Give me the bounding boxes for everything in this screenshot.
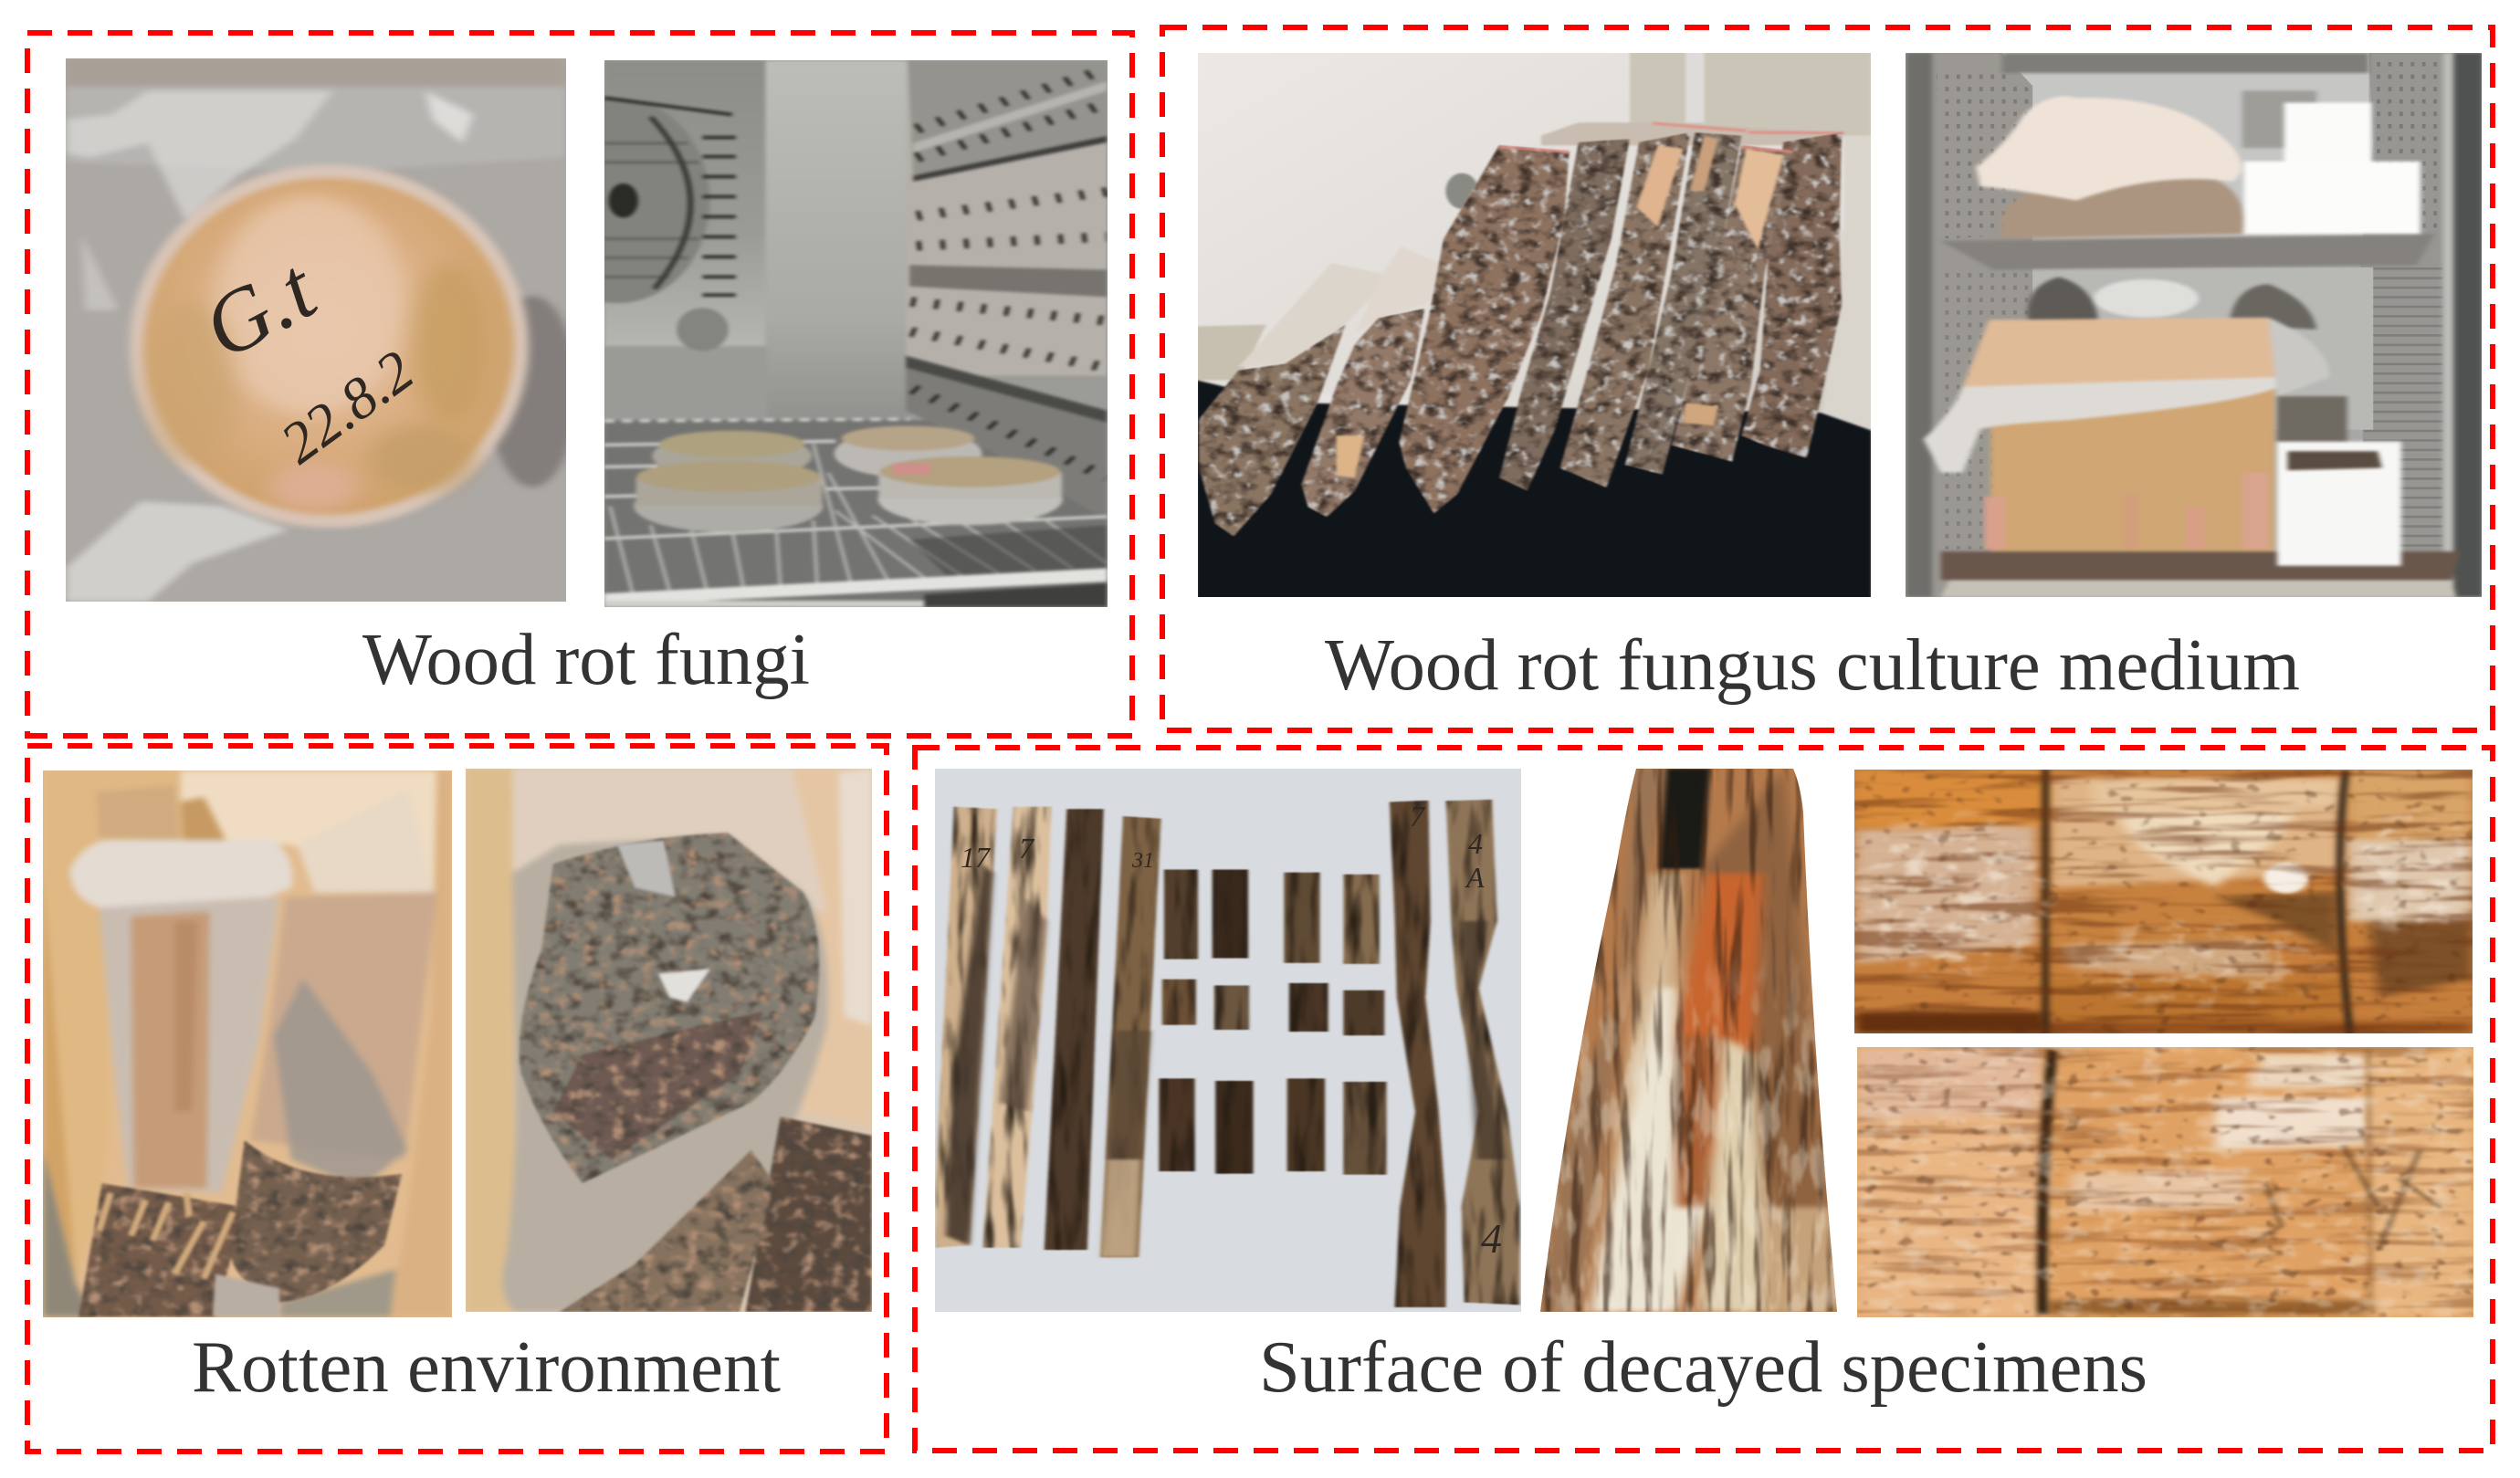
handwriting on specimens: 4 [1468, 827, 1483, 860]
photo: decayed wood sticks, blocks and dog-bone specimens [935, 769, 1521, 1312]
photo: incubator with four dishes on a rack [604, 60, 1108, 607]
photo: wood logs in plastic bags beside boards [43, 770, 452, 1317]
photo: tapered decayed timber post [1540, 769, 1837, 1312]
panel: wood rot fungus culture medium [1162, 27, 2493, 730]
handwriting on specimens [961, 800, 1502, 1262]
photo: decayed timber surface, lower [1857, 1047, 2473, 1317]
caption: Wood rot fungus culture medium: Wood rot fungus culture medium [1325, 624, 2300, 706]
panel: surface of decayed specimens [915, 748, 2493, 1451]
panel: wood rot fungi [27, 33, 1132, 736]
panel: rotten environment [27, 746, 887, 1452]
photo: decayed timber surface, upper [1835, 770, 2483, 1033]
handwriting on specimens: 7 [1019, 832, 1035, 865]
photo: close-up of a bag of decayed wood chips [466, 769, 872, 1312]
handwriting on specimens: A [1465, 861, 1485, 894]
photo: bags of wood chips leaning against a wall [1196, 51, 1872, 599]
photo: petri dish labelled G.t in a plastic bag [66, 58, 577, 602]
photo: incubator with bagged medium, foam and cardboard box [1906, 53, 2483, 597]
caption: Rotten environment: Rotten environment [192, 1326, 781, 1408]
handwriting on specimens: 17 [961, 841, 992, 874]
caption: Surface of decayed specimens: Surface of decayed specimens [1259, 1326, 2147, 1408]
handwriting: 22.8.2: 22.8.2 [268, 338, 425, 476]
handwriting: G.t: G.t [188, 239, 332, 378]
caption: Wood rot fungi: Wood rot fungi [362, 618, 810, 700]
handwriting on specimens: 31 [1131, 849, 1154, 873]
handwriting on specimens: 4 [1481, 1215, 1502, 1262]
handwriting on specimens: 7 [1410, 800, 1426, 833]
